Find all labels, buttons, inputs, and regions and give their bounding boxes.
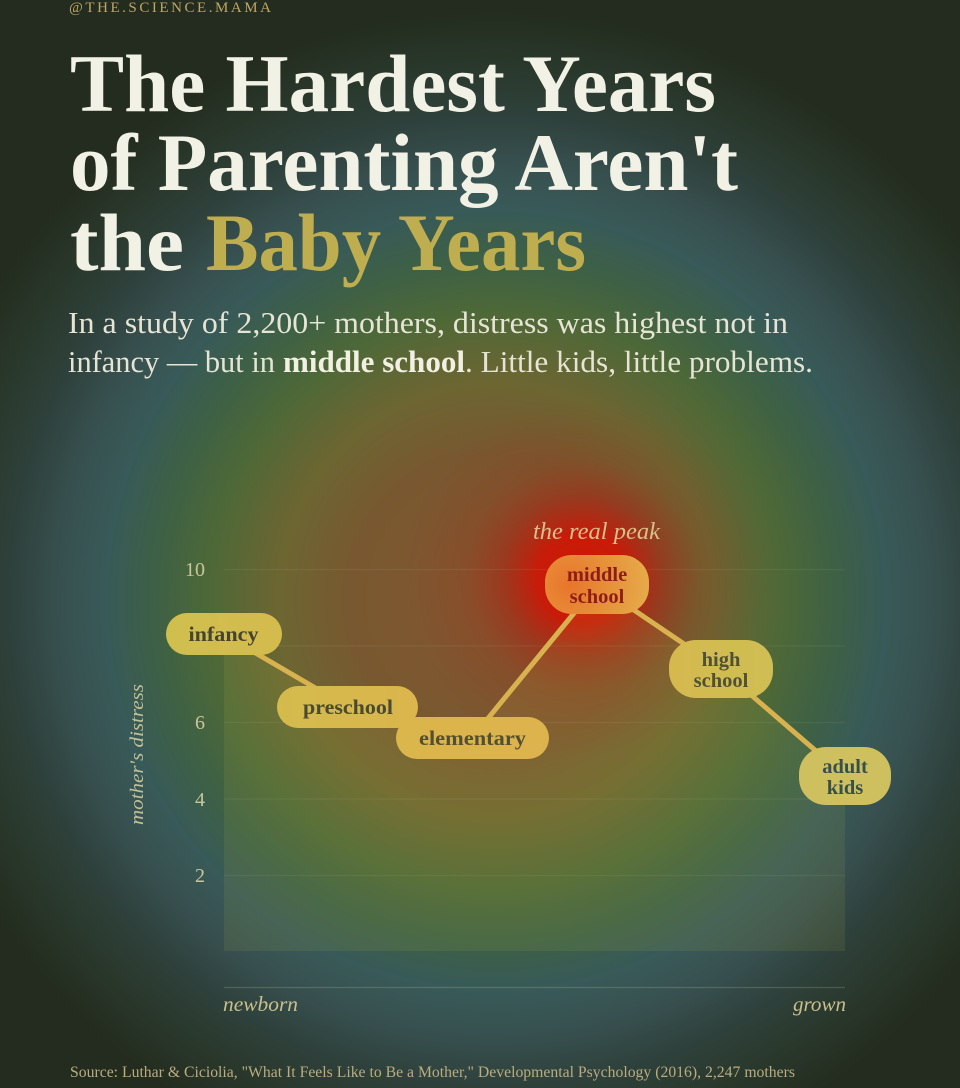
source: Source: Luthar & Ciciolia, "What It Feels Like to Be a Mother," Developmental Psychology (2016), 2,247 mothers (70, 1064, 795, 1081)
subtitle: infancy — but in (68, 344, 275, 379)
pill: infancy: infancy (188, 622, 259, 646)
pill: elementary: elementary (419, 726, 527, 750)
x axis end label: grown (793, 992, 846, 1016)
handle: @THE.SCIENCE.MAMA (69, 0, 271, 16)
pill: preschool (277, 686, 418, 728)
pill: adult kids: kids (827, 777, 863, 799)
title: The Hardest Years (70, 38, 716, 129)
title: the (70, 197, 184, 288)
pill: preschool: preschool (303, 695, 393, 719)
pill: elementary (396, 717, 549, 759)
y axis numbers: 2 (195, 865, 205, 887)
y axis numbers: 10 (185, 559, 205, 581)
area under line (224, 585, 845, 951)
title: Baby Years (206, 197, 586, 288)
title: of Parenting Aren't (70, 117, 738, 208)
subtitle: In a study of 2,200+ mothers, distress was highest not in (68, 305, 788, 340)
gridlines (224, 570, 845, 876)
pill: high school: school (694, 670, 749, 692)
pill: infancy (166, 613, 282, 655)
subtitle (68, 305, 813, 379)
pill: adult kids (799, 747, 891, 805)
trend line (223, 585, 845, 776)
pill: adult kids: adult (822, 756, 868, 778)
x axis start label: newborn (223, 992, 298, 1016)
y axis numbers: 6 (195, 712, 205, 734)
title (70, 38, 738, 288)
y axis title: mother's distress (127, 684, 148, 825)
pill: high school: high (702, 649, 741, 671)
chart (127, 519, 891, 1016)
pill: middle school: school (570, 586, 625, 608)
pill: high school (669, 640, 773, 698)
y axis numbers (185, 559, 205, 887)
pill: middle school: middle (567, 564, 627, 586)
subtitle: middle school (283, 344, 465, 379)
peak annotation: the real peak (533, 519, 660, 545)
y axis numbers: 4 (195, 789, 205, 811)
x axis line (224, 986, 845, 988)
pill: middle school (545, 555, 649, 614)
subtitle: . Little kids, little problems. (465, 344, 813, 379)
